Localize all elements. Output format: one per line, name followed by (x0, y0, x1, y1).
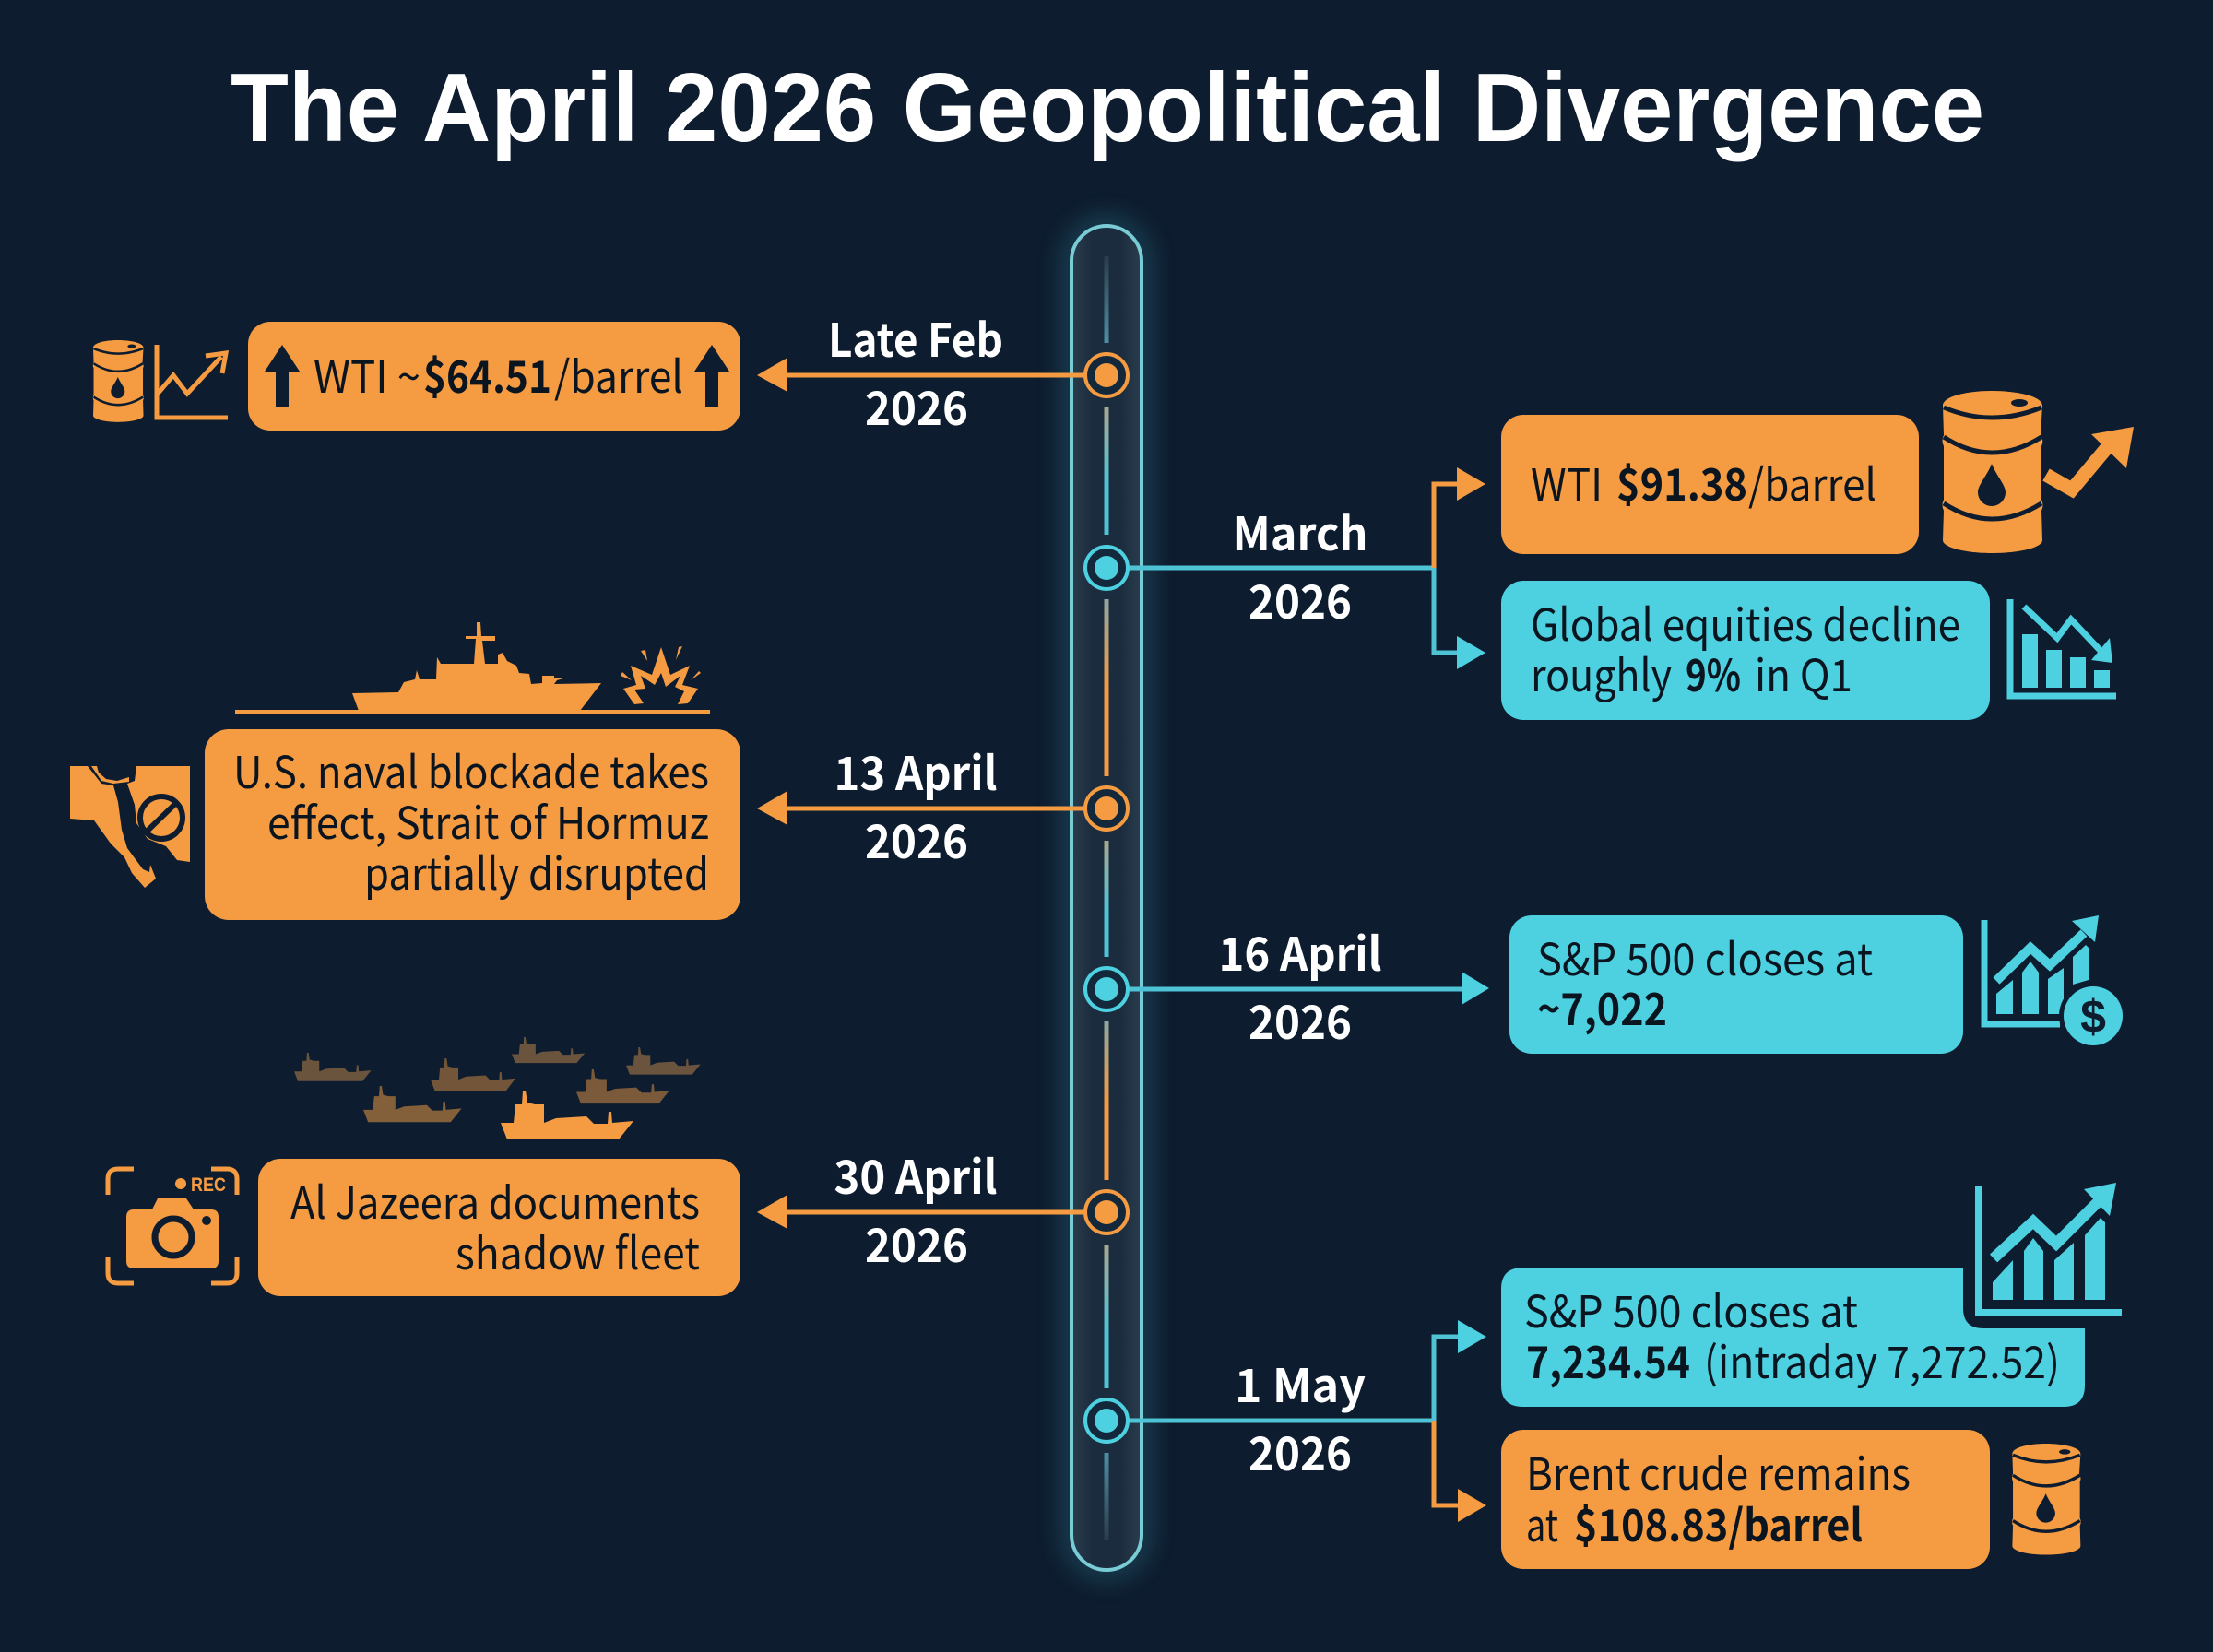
node: 16 April (1085, 968, 1128, 1010)
panel: global equities: roughly (1531, 640, 1672, 704)
date: 30 April 2026: 30 April (834, 1141, 998, 1208)
icon: explosion (621, 646, 701, 704)
date: 1 May 2026: 1 May (1235, 1350, 1366, 1416)
icon: rising arrow (2046, 427, 2134, 490)
icon: up arrow right (694, 345, 729, 407)
icon: rising chart with dollar coin (1984, 915, 2127, 1050)
timeline spine (1071, 226, 1142, 1570)
date: 1 May 2026: 2026 (1249, 1418, 1352, 1484)
panel: S&P 7,022: ~7,022 (1537, 974, 1667, 1038)
icon: rising chart with dollar coin: $ (2080, 991, 2106, 1043)
panel: global equities: Global equities decline (1531, 589, 1960, 654)
date: Late Feb 2026: Late Feb (828, 304, 1003, 371)
node: 1 May (1085, 1399, 1128, 1442)
panel: WTI 91.38: $91.38 (1616, 449, 1747, 513)
panel: naval blockade: U.S. naval blockade takes (233, 737, 709, 801)
panel: WTI 64.51: WTI ~ (314, 341, 420, 406)
panel: Al Jazeera (258, 1159, 740, 1296)
icon: falling bar chart (2010, 599, 2116, 696)
date: 1 May 2026 (1235, 1350, 1366, 1484)
panel: Brent crude (1501, 1430, 1990, 1569)
panel: Al Jazeera: Al Jazeera documents (290, 1167, 700, 1232)
panel: global equities (1501, 581, 1990, 720)
panel: S&P 7,234.54: (intraday 7,272.52) (1704, 1327, 2060, 1391)
panel: WTI 91.38: /barrel (1748, 449, 1876, 513)
connector: 13 April arrow (757, 791, 1084, 825)
panel: WTI 64.51 (248, 322, 740, 431)
panel: S&P 7,022: S&P 500 closes at (1537, 924, 1873, 988)
icon: small barrel top left (93, 340, 144, 422)
connector: March branch (1129, 467, 1485, 669)
date: Late Feb 2026: 2026 (865, 372, 968, 439)
date: 13 April 2026 (834, 738, 998, 872)
date: 13 April 2026: 2026 (865, 806, 968, 872)
panel: WTI 91.38: WTI (1531, 449, 1603, 513)
date: 13 April 2026: 13 April (834, 738, 998, 804)
date: 30 April 2026 (834, 1141, 998, 1276)
date: March 2026: 2026 (1249, 566, 1352, 632)
panel: naval blockade: partially disrupted (364, 838, 709, 903)
icon: up arrow left (265, 345, 300, 407)
panel: global equities: 9% (1686, 640, 1741, 704)
connector: 30 April arrow (757, 1195, 1084, 1229)
icon: camera with REC: REC (191, 1174, 226, 1196)
node: 13 April (1085, 787, 1128, 830)
connector: Late Feb arrow (757, 358, 1084, 392)
date: 30 April 2026: 2026 (865, 1210, 968, 1276)
date: 16 April 2026: 16 April (1219, 918, 1381, 985)
panel: Al Jazeera: shadow fleet (456, 1218, 700, 1282)
panel: S&P 7,234.54 (1501, 1268, 2085, 1407)
date: 16 April 2026: 2026 (1249, 986, 1352, 1053)
icon: bottom right barrel (2012, 1444, 2081, 1555)
node: Late Feb (1085, 354, 1128, 396)
panel: naval blockade: effect, Strait of Hormuz (267, 787, 709, 852)
panel: S&P 7,022 (1509, 915, 1963, 1054)
panel: WTI 91.38 (1501, 415, 1919, 554)
panel: Brent crude: $108.83/barrel (1574, 1490, 1863, 1554)
title: The April 2026 Geopolitical Divergence (231, 53, 1984, 162)
panel: S&P 7,234.54: S&P 500 closes at (1524, 1276, 1858, 1340)
icon: camera with REC (108, 1169, 237, 1283)
connector: 16 April arrow (1129, 972, 1489, 1005)
icon: large barrel (1942, 391, 2043, 553)
date: March 2026: March (1232, 498, 1368, 564)
panel: S&P 7,234.54: 7,234.54 (1526, 1327, 1690, 1391)
date: March 2026 (1232, 498, 1368, 632)
date: 16 April 2026 (1219, 918, 1381, 1053)
date: Late Feb 2026 (828, 304, 1003, 439)
icon: warship (235, 622, 710, 714)
node: March (1085, 547, 1128, 589)
icon: strait map with prohibition sign (70, 766, 190, 888)
panel: naval blockade (205, 729, 740, 920)
panel: Brent crude: Brent crude remains (1526, 1438, 1911, 1503)
node: 30 April (1085, 1191, 1128, 1233)
icon: shadow fleet ships (294, 1037, 701, 1139)
panel: global equities: in Q1 (1755, 640, 1852, 704)
connector: 1 May branch (1129, 1320, 1486, 1522)
icon: rising bar chart (1979, 1183, 2122, 1313)
panel: Brent crude: at (1526, 1490, 1558, 1554)
panel: WTI 64.51: $64.51 (423, 341, 551, 406)
panel: WTI 64.51: /barrel (554, 341, 683, 406)
icon: small line chart (157, 345, 228, 418)
